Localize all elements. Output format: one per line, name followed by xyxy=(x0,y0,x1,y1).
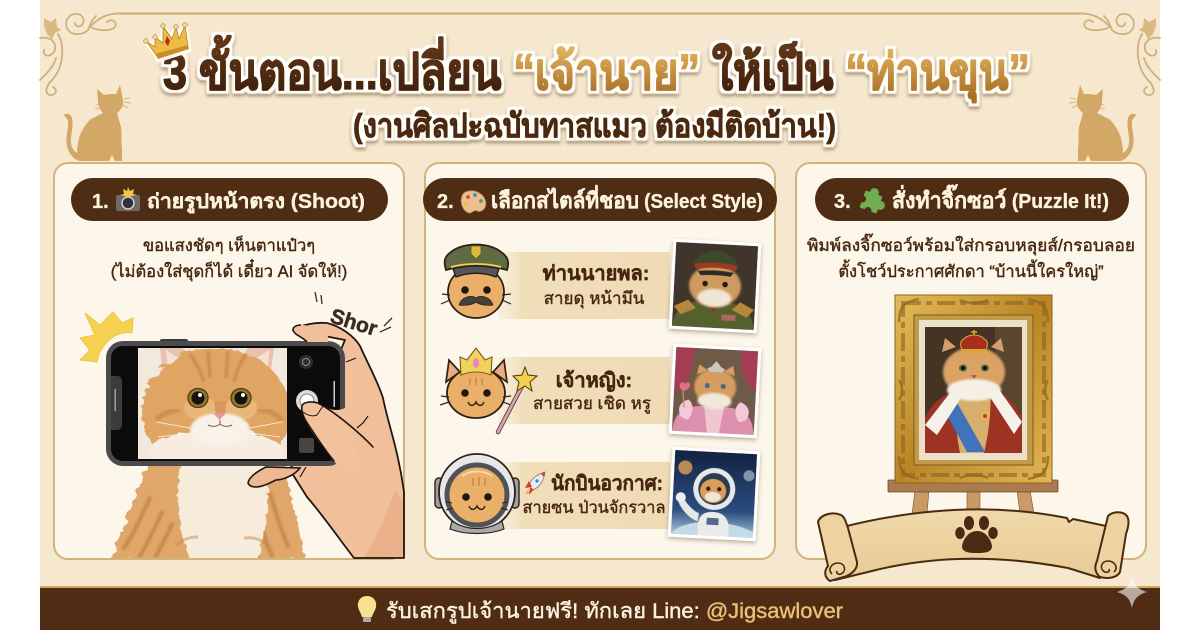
panel card xyxy=(796,163,1146,559)
photo: general cat portrait xyxy=(669,239,761,333)
label text princess: สายสวย เชิด หรู xyxy=(533,394,651,414)
label band xyxy=(498,462,670,529)
icon: princess cat with tiara and wand xyxy=(440,348,537,432)
icon: cat silhouette left xyxy=(64,85,131,161)
label text astronaut: นักบินอวกาศ: xyxy=(551,473,663,495)
label subtext astronaut: สายซน ป่วนจักรวาล xyxy=(522,498,666,517)
panel: step 3 puzzle xyxy=(796,163,1146,581)
frame corner carving xyxy=(899,299,1048,479)
heading pill step 1 xyxy=(71,178,388,221)
heading pill step 3: สั่งทำจิ๊กซอว์ (Puzzle It!) xyxy=(892,184,1109,213)
label text general: สายดุ หน้ามึน xyxy=(544,289,645,309)
footer bar xyxy=(40,586,1160,630)
label: shutter sound text xyxy=(315,292,392,341)
description step 3 xyxy=(807,233,1135,281)
ornate gold frame with king cat portrait xyxy=(895,295,1052,483)
heading pill step 1: 1. xyxy=(92,191,109,213)
icon: palette xyxy=(461,191,486,213)
phone screen photo of cat xyxy=(138,348,287,459)
hand fingers over phone xyxy=(248,325,403,557)
label text princess: เจ้าหญิง: xyxy=(556,369,632,392)
description step 3: พิมพ์ลงจิ๊กซอว์พร้อมใส่กรอบหลุยส์/กรอบลอย xyxy=(807,233,1135,256)
icon: green puzzle piece xyxy=(855,184,890,219)
icon: general cat with cap xyxy=(441,244,511,318)
photo: astronaut cat portrait xyxy=(668,447,760,541)
heading pill step 2: เลือกสไตล์ที่ชอบ (Select Style) xyxy=(491,184,763,213)
panel card xyxy=(425,163,775,559)
title: 3 ขั้นตอน...เปลี่ยน “เจ้านาย” ให้เป็น “ท่านขุน” xyxy=(163,35,1030,103)
style row: princess xyxy=(440,344,761,438)
phone xyxy=(106,339,345,476)
subtitle: (งานศิลปะฉบับทาสแมว ต้องมีติดบ้าน!) xyxy=(353,107,836,144)
icon: cat silhouette right xyxy=(1069,85,1136,161)
label band xyxy=(498,252,670,319)
icon: light bulb xyxy=(358,596,376,622)
heading pill step 3: 3. xyxy=(834,191,851,213)
description step 1: (ไม่ต้องใส่ชุดก็ได้ เดี๋ยว AI จัดให้!) xyxy=(111,258,347,282)
photo: princess cat portrait xyxy=(669,344,761,438)
panel: step 1 shoot xyxy=(54,163,404,560)
icon: yellow flash burst xyxy=(80,312,133,362)
ribbon scroll banner xyxy=(818,509,1129,581)
icon: paw print xyxy=(955,516,998,553)
label text general: ท่านนายพล: xyxy=(543,263,649,285)
panel: step 2 select style xyxy=(40,163,1160,630)
icon: camera with flash xyxy=(116,187,140,211)
heading pill step 3 xyxy=(815,178,1129,221)
description step 1 xyxy=(111,235,347,282)
icon: astronaut cat in helmet xyxy=(435,454,519,534)
icon: gold crown xyxy=(144,23,189,60)
label band xyxy=(498,357,670,424)
footer text: รับเสกรูปเจ้านายฟรี! ทักเลย Line: @Jigsawlover xyxy=(386,600,843,624)
label: shutter sound text: Shor xyxy=(328,305,380,341)
description step 1: ขอแสงชัดๆ เห็นตาแป๋วๆ xyxy=(143,235,315,255)
easel xyxy=(888,480,1058,514)
icon: rocket xyxy=(525,472,545,495)
label text general xyxy=(543,263,649,309)
cat body below phone xyxy=(110,462,306,560)
heading pill step 2: 2. xyxy=(437,191,454,213)
panel card xyxy=(54,163,404,559)
decorative top frame and corner ornaments xyxy=(40,13,1160,95)
label text princess xyxy=(533,369,651,414)
painting: king cat xyxy=(925,327,1022,453)
description step 3: ตั้งโชว์ประกาศศักดา “บ้านนี้ใครใหญ่” xyxy=(838,259,1104,281)
style row: astronaut xyxy=(435,447,760,541)
hand behind phone xyxy=(290,323,404,558)
heading pill step 2 xyxy=(423,178,777,221)
heading pill step 1: ถ่ายรูปหน้าตรง (Shoot) xyxy=(147,190,365,215)
style row: general xyxy=(441,239,761,333)
icon: sparkle watermark xyxy=(1117,576,1147,608)
camera app controls xyxy=(296,355,335,453)
